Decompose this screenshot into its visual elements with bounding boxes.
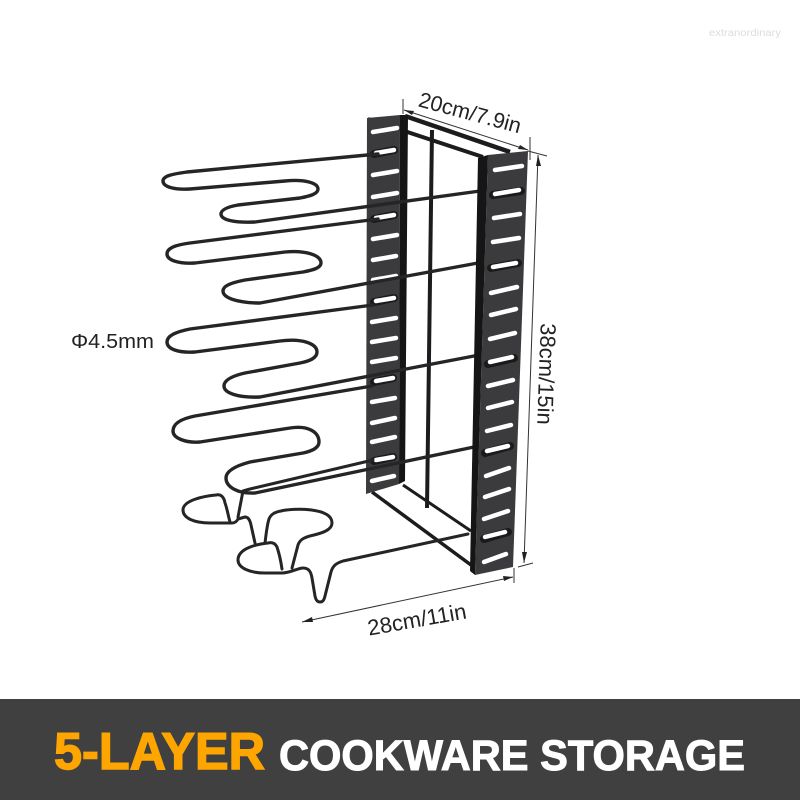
- right upright panel: [470, 151, 528, 575]
- title: highlighted part: 5-LAYER: [54, 723, 265, 781]
- lower hook wires: [183, 460, 468, 602]
- shelf wire 4: [173, 386, 474, 493]
- wire shelves: [163, 154, 480, 602]
- dimension: depth 28cm: 28cm/11in: [366, 599, 468, 640]
- title banner: [0, 699, 800, 800]
- wire diameter label: Φ4.5mm: [71, 331, 154, 353]
- dimension: height 38cm: 38cm/15in: [532, 323, 561, 425]
- shelf wire 3: [167, 305, 474, 397]
- rear frame bars: [368, 116, 510, 565]
- dimension: width 20cm: [403, 88, 530, 160]
- shelf wire 1: [163, 154, 480, 222]
- dimension: depth 28cm: [302, 568, 514, 640]
- dimension: width 20cm: 20cm/7.9in: [416, 88, 524, 138]
- dimension: height 38cm: [518, 151, 561, 567]
- watermark: extranordinary: [709, 27, 782, 39]
- left upright panel: [366, 115, 408, 494]
- title: white part: COOKWARE STORAGE: [279, 732, 745, 780]
- shelf wire 2: [167, 219, 478, 303]
